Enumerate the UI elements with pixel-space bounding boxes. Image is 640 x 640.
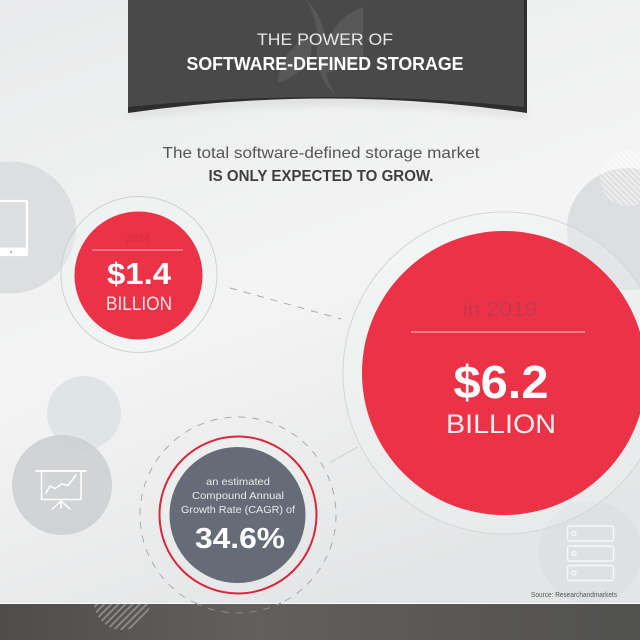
panel: 2019 value xyxy=(343,212,640,534)
background circle: pale blue xyxy=(47,376,121,450)
title line 1: THE POWER OF xyxy=(257,30,393,49)
icon: tablet xyxy=(0,201,27,255)
connector: solid line xyxy=(329,447,358,463)
panel: 2014 value: BILLION xyxy=(106,294,172,315)
subtitle: The total software-defined storage market xyxy=(162,145,480,162)
connector: dashed line xyxy=(230,288,341,319)
panel: CAGR: 34.6% xyxy=(195,523,285,555)
striped circle: footer xyxy=(94,604,150,630)
panel: CAGR: an estimated xyxy=(206,476,270,488)
subtitle xyxy=(162,145,480,185)
icon: server rack xyxy=(568,526,614,580)
subtitle: IS ONLY EXPECTED TO GROW. xyxy=(208,168,434,185)
panel: 2014 value: 2014 xyxy=(126,233,150,245)
panel: 2019 value: in 2019 xyxy=(462,299,538,321)
panel: 2019 value: $6.2 xyxy=(454,356,548,408)
striped circle: top right xyxy=(600,150,640,206)
icon: presentation board xyxy=(36,471,86,509)
panel: 2019 value: BILLION xyxy=(446,409,556,439)
source note: Source: Researchandmarkets xyxy=(531,592,617,599)
dashed ring continuation over footer xyxy=(195,603,281,613)
background circle: right edge xyxy=(567,168,640,290)
banner shadow xyxy=(128,98,527,117)
title line 2: SOFTWARE-DEFINED STORAGE xyxy=(186,54,464,74)
background circle: server xyxy=(539,501,640,603)
panel: CAGR: Compound Annual xyxy=(192,490,284,502)
banner xyxy=(128,0,527,117)
panel: CAGR xyxy=(140,417,336,613)
panel: CAGR: Growth Rate (CAGR) of xyxy=(181,504,295,516)
footer band xyxy=(0,602,640,640)
panel: 2014 value xyxy=(61,196,217,352)
banner logo watermark xyxy=(278,0,363,96)
background circle: presentation xyxy=(12,435,112,535)
background circle: tablet xyxy=(0,162,76,294)
panel: 2014 value: $1.4 xyxy=(107,256,172,291)
